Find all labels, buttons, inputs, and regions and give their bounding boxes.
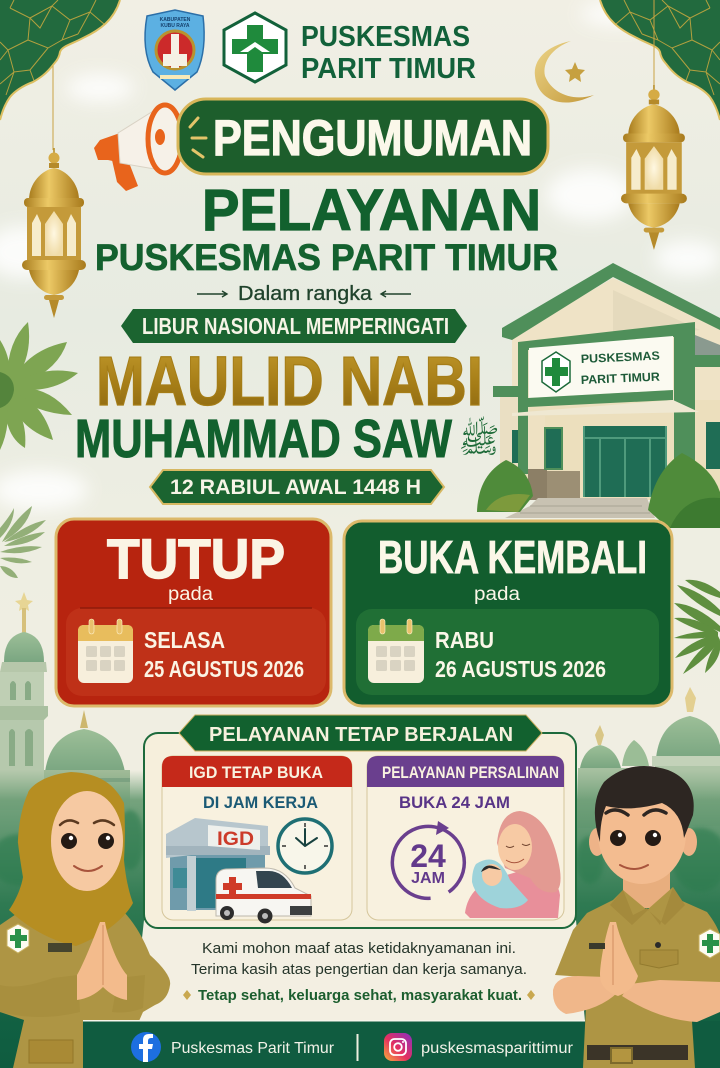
services banner: [179, 715, 542, 751]
logo: kabupaten shield: KABUPATEN: [160, 17, 191, 23]
icon: crescent and star: [535, 41, 594, 103]
illustration: palm tree: [0, 322, 78, 450]
message text: Kami mohon maaf atas ketidaknyamanan ini.: [202, 940, 516, 957]
tutup date panel: [66, 608, 326, 696]
top right corner ornament: [600, 0, 720, 120]
illustration: clinic building: PUSKESMAS: [581, 349, 660, 366]
illustration: palm frond left: [0, 506, 46, 578]
banner: libur nasional: [121, 309, 467, 343]
icon: clock: [278, 819, 332, 873]
top left corner ornament: [0, 0, 120, 120]
illustration: mother and baby: [465, 811, 561, 918]
forest backdrop: [0, 770, 720, 1068]
instagram handle: puskesmasparittimur: [421, 1040, 574, 1057]
icon: right lantern: [621, 0, 687, 250]
heading: pelayanan: PELAYANAN: [202, 178, 541, 243]
icon: 24 hour circle: JAM: [411, 870, 445, 887]
calendar icon green: [368, 619, 424, 683]
card: igd: IGD TETAP BUKA: [189, 763, 323, 782]
mosque backdrop left: [0, 592, 130, 810]
tutup title: TUTUP: [107, 527, 285, 590]
message text: [183, 940, 535, 1004]
buka pada: pada: [474, 584, 520, 605]
header: puskesmas name: PARIT TIMUR: [301, 53, 476, 85]
logo: puskesmas hexagon: [224, 13, 286, 82]
message text: Terima kasih atas pengertian dan kerja samanya.: [191, 961, 527, 978]
character: woman in hijab: [0, 772, 170, 1068]
illustration: clinic building: PARIT TIMUR: [581, 370, 660, 387]
logo: kabupaten shield: KUBU RAYA: [160, 23, 190, 29]
card: igd: [162, 756, 352, 924]
services banner: PELAYANAN TETAP BERJALAN: [209, 724, 513, 746]
header: puskesmas name: [301, 21, 476, 85]
card: persalinan: [367, 756, 564, 920]
icon: left lantern: [22, 66, 86, 318]
icon: megaphone: [94, 105, 182, 191]
banner: hijri date: 12 RABIUL AWAL 1448 H: [170, 476, 421, 499]
heading: muhammad saw: MUHAMMAD SAW: [75, 409, 452, 469]
card: persalinan: BUKA 24 JAM: [399, 793, 510, 812]
heading: maulid nabi: MAULID NABI: [96, 342, 483, 420]
logo: kabupaten shield: [145, 10, 204, 90]
opening date: 26 AGUSTUS 2026: [435, 656, 606, 682]
panel: cream message background: [133, 920, 585, 1021]
message text: Tetap sehat, keluarga sehat, masyarakat kuat.: [198, 987, 522, 1004]
closing day: SELASA: [144, 627, 225, 653]
illustration: ambulance: [216, 868, 312, 924]
banner: libur nasional: LIBUR NASIONAL MEMPERINGATI: [142, 313, 449, 339]
card: igd: DI JAM KERJA: [203, 793, 318, 812]
closing date: 25 AGUSTUS 2026: [144, 656, 304, 682]
character: man in uniform: [553, 766, 720, 1068]
opening day: RABU: [435, 627, 494, 653]
header: puskesmas name: PUSKESMAS: [301, 21, 470, 53]
icon: 24 hour circle: [380, 815, 476, 910]
subheading: dalam rangka: [197, 283, 411, 305]
tutup pada: pada: [168, 584, 213, 605]
banner: pengumuman: [178, 99, 548, 174]
banner: hijri date: [150, 470, 444, 504]
card: persalinan: PELAYANAN PERSALINAN: [382, 763, 559, 782]
subheading: dalam rangka: Dalam rangka: [238, 283, 373, 305]
illustration: palm frond right: [674, 580, 720, 674]
buka date panel: [356, 609, 659, 695]
illustration: clinic building: [477, 263, 720, 528]
icon: instagram: [384, 1033, 412, 1061]
illustration: igd building: [166, 818, 270, 911]
facebook name: Puskesmas Parit Timur: [171, 1040, 335, 1057]
icon: 24 hour circle: 24: [410, 838, 446, 874]
card: tutup: [56, 519, 331, 706]
banner: pengumuman: PENGUMUMAN: [213, 110, 532, 166]
card: buka kembali: [344, 521, 672, 706]
calendar icon red: [78, 619, 133, 683]
footer bar: [83, 1020, 720, 1068]
illustration: igd building: IGD: [217, 829, 254, 850]
icon: facebook: [131, 1032, 161, 1062]
panel: pelayanan tetap berjalan: [144, 715, 576, 928]
heading: puskesmas parit timur: PUSKESMAS PARIT TIMUR: [95, 237, 558, 278]
mosque backdrop right: [578, 687, 720, 828]
heading: muhammad saw: ﷺ: [458, 416, 500, 461]
